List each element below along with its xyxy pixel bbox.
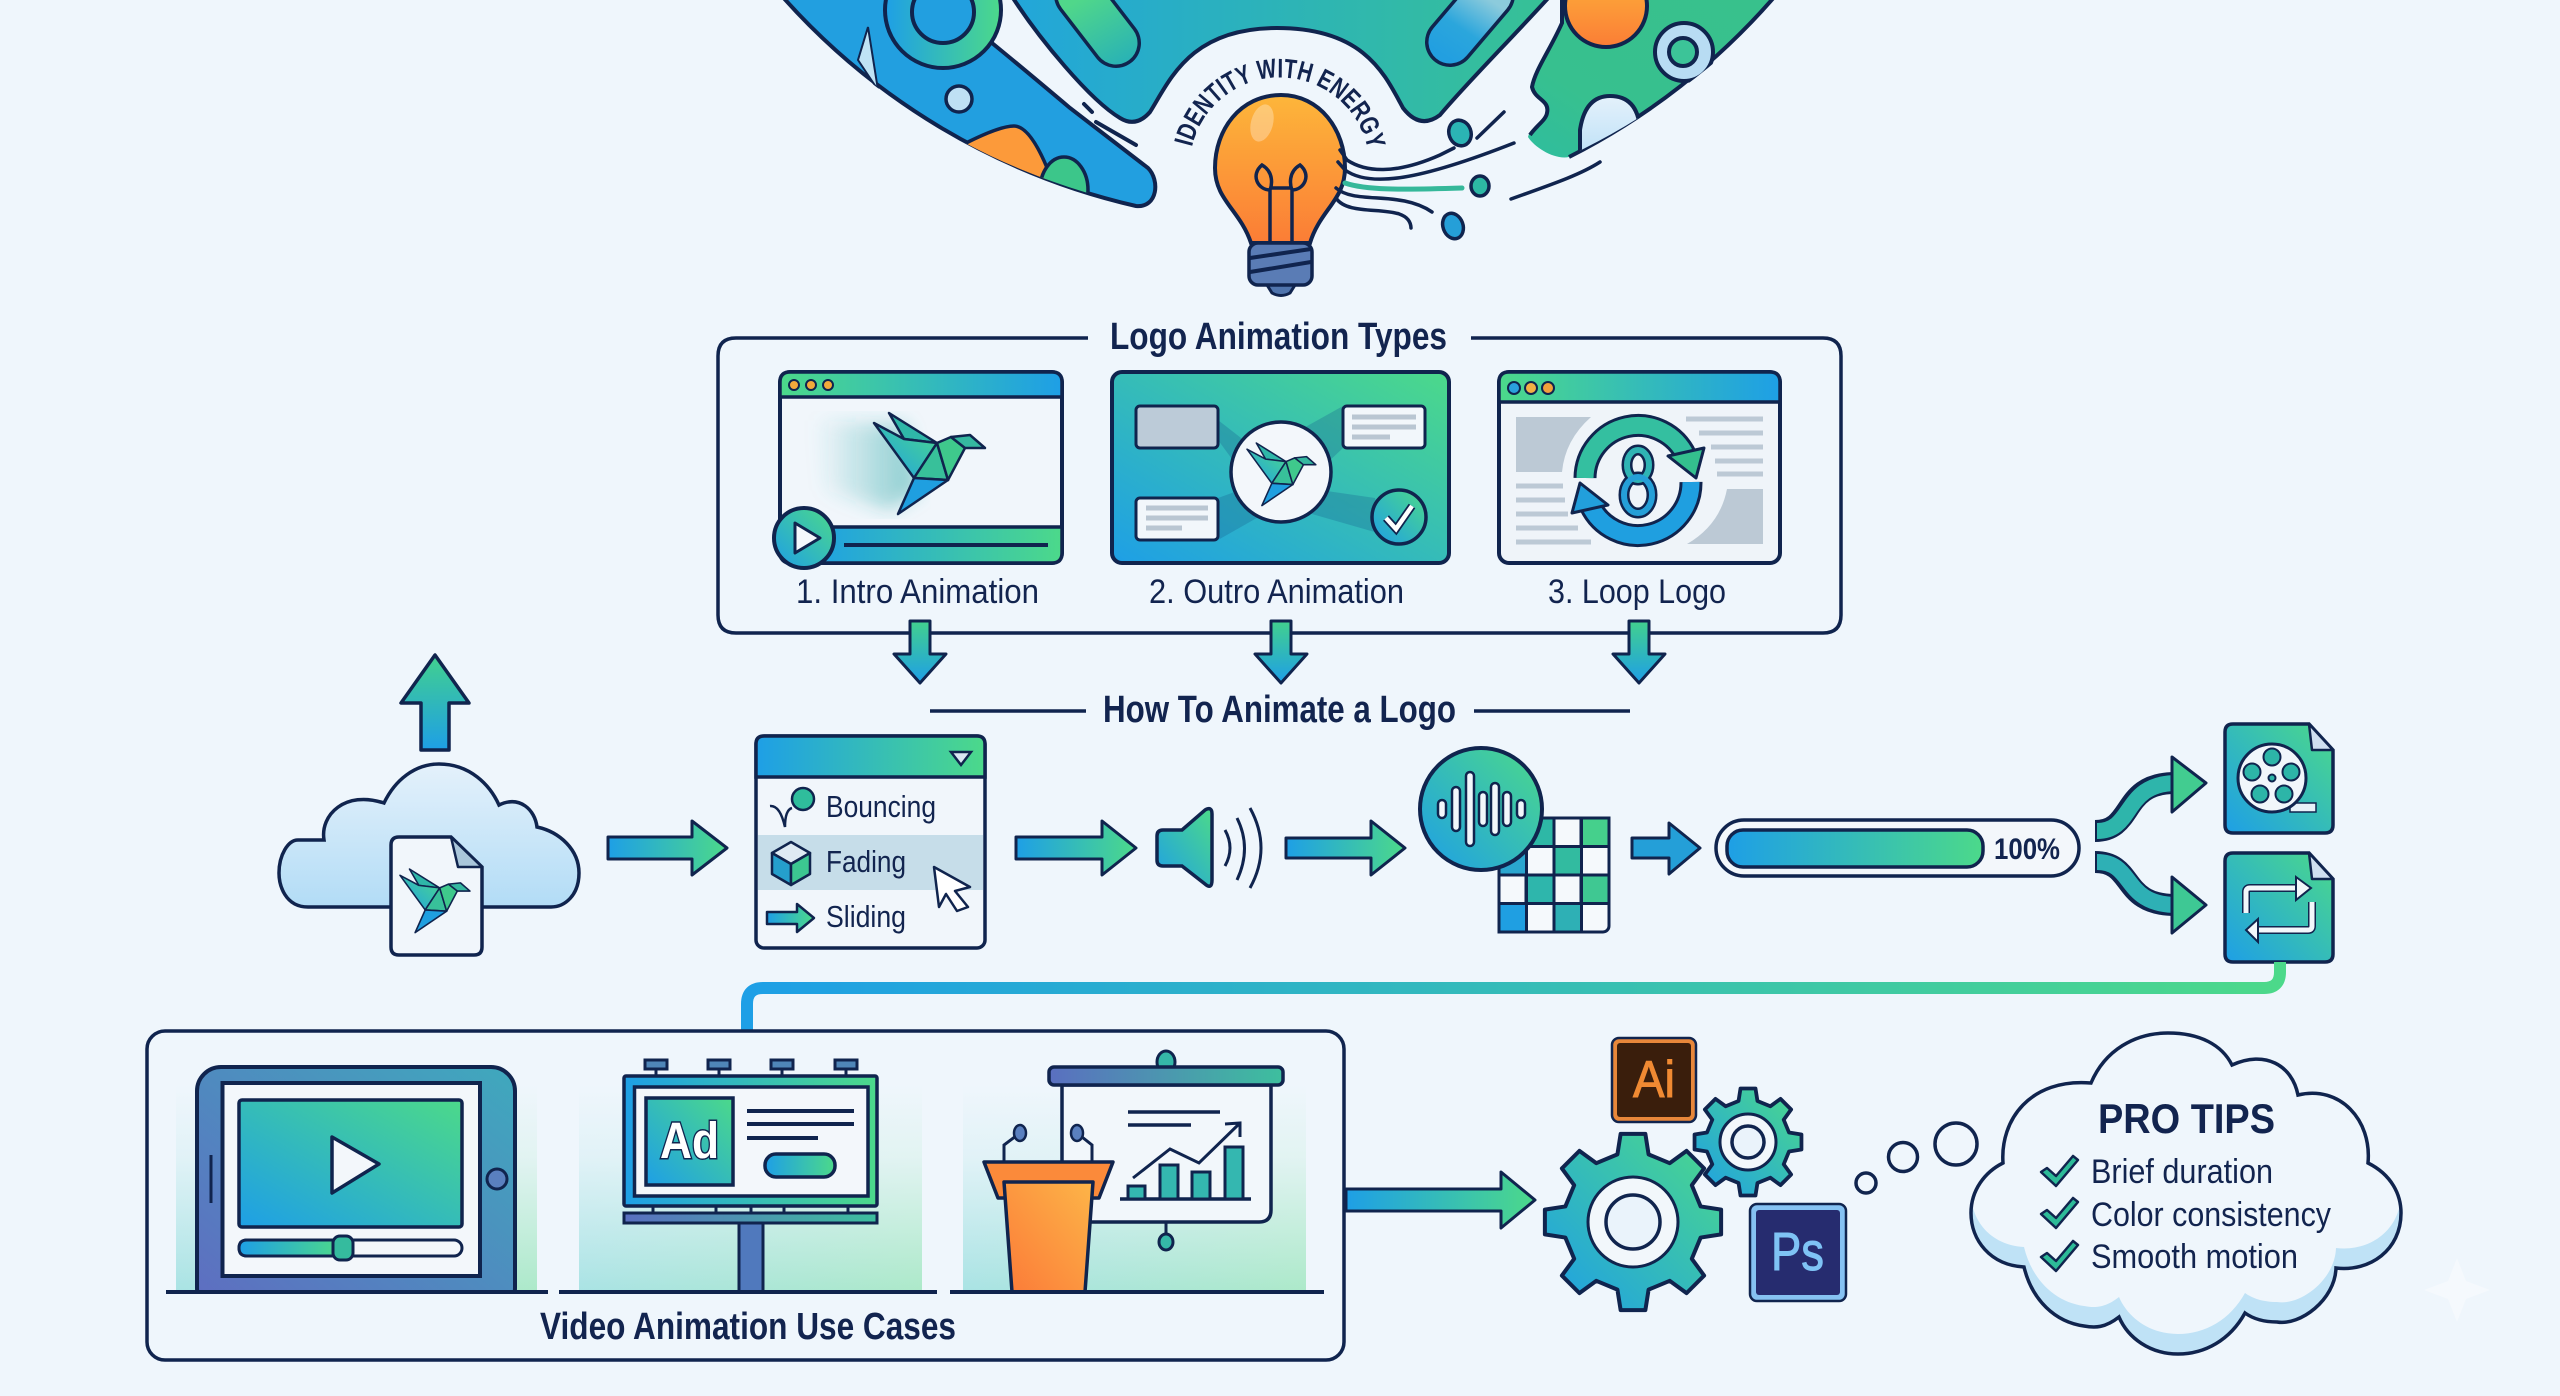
- tip: color consistency: Color consistency: [2091, 1196, 2331, 1234]
- arrow: timeline to render: [1632, 823, 1700, 874]
- use case: presentation: [963, 1051, 1306, 1292]
- tip: smooth motion: Smooth motion: [2091, 1238, 2298, 1276]
- arrow: curved to loop file: [2095, 862, 2206, 933]
- small light dot: [946, 86, 972, 112]
- card: loop logo: [1499, 372, 1780, 563]
- light ring: [1655, 23, 1713, 81]
- label: loop logo: 3. Loop Logo: [1548, 573, 1726, 611]
- card: intro animation: [774, 372, 1062, 568]
- icon: cursor: [934, 867, 970, 911]
- icon: loop file: [2225, 853, 2333, 962]
- top identity disc: [781, 0, 1776, 223]
- light hill: [1578, 94, 1639, 150]
- panel: animation menu: [756, 736, 985, 948]
- sparkle watermark: [2424, 1258, 2490, 1322]
- icon: speaker: [1157, 808, 1261, 888]
- arc text: identity with energy: [1192, 77, 1370, 221]
- arrow: upload up: [401, 655, 469, 750]
- dashes: [1084, 104, 1136, 145]
- icon: origami bird small: [1247, 443, 1316, 506]
- panel: logo animation types: [718, 316, 1841, 633]
- callout: pro tips cloud: [1971, 1013, 2401, 1354]
- arrow: use cases to tools: [1346, 1172, 1535, 1228]
- heading: logo animation types: Logo Animation Types: [1110, 316, 1447, 358]
- label: sliding: Sliding: [826, 899, 906, 934]
- energy dot blue: [1439, 210, 1467, 242]
- icon: cube: [772, 842, 810, 885]
- icon: podium: [984, 1125, 1113, 1292]
- progress bar: [1716, 820, 2079, 876]
- icon: illustrator badge: [1612, 1038, 1696, 1122]
- arrow: audio to timeline: [1286, 821, 1405, 875]
- heading: video animation use cases: Video Animation Use Cases: [540, 1306, 956, 1348]
- orange hill: [966, 126, 1048, 185]
- icon: timeline grid: [1499, 818, 1609, 932]
- arrow: menu to audio: [1016, 821, 1136, 875]
- icon: slide arrow: [767, 904, 814, 932]
- chart: growth bars: [1120, 1112, 1251, 1199]
- arrow: down from loop: [1613, 621, 1665, 683]
- icon: play button: [774, 508, 834, 568]
- label: outro animation: 2. Outro Animation: [1149, 573, 1404, 611]
- icon: loop arrows: [1572, 425, 1704, 536]
- label: 100%: 100%: [1994, 833, 2060, 866]
- connector line: [747, 962, 2280, 1032]
- label: intro animation: 1. Intro Animation: [796, 573, 1039, 611]
- green ring: [885, 0, 1001, 68]
- green disc segment: [1528, 0, 1776, 157]
- thought bubbles: [1856, 1123, 1977, 1193]
- energy dot teal: [1445, 117, 1475, 149]
- label: ai: Ai: [1633, 1051, 1675, 1109]
- icon: check badge: [1372, 490, 1426, 544]
- blue disc segment: [781, 0, 1155, 206]
- panel: video animation use cases: [147, 1031, 1344, 1360]
- arrow: curved to video file: [2095, 757, 2206, 831]
- card: outro animation: [1112, 372, 1449, 563]
- icon: video file: [2225, 724, 2333, 833]
- pen sliver: [858, 27, 878, 90]
- label: ad: Ad: [660, 1112, 719, 1169]
- icon: small gear: [1695, 1089, 1801, 1195]
- label: fading: Fading: [826, 844, 906, 879]
- orange circle: [1565, 0, 1647, 47]
- green segment outline: [1530, 0, 1776, 157]
- label: bouncing: Bouncing: [826, 789, 936, 824]
- arrow: down from intro: [894, 621, 946, 683]
- infographic canvas: IDENTITY WITH ENERGY: [1174, 58, 1386, 146]
- arrow: cloud to menu: [608, 821, 727, 875]
- icon: bouncing ball: [770, 788, 814, 827]
- icon: large gear: [1545, 1134, 1721, 1310]
- icon: audio waveform circle: [1420, 748, 1542, 870]
- icon: light bulb: [1215, 95, 1345, 296]
- blue finger: [1450, 0, 1490, 42]
- icon: cloud with logo file: [279, 764, 579, 955]
- energy dot green: [1471, 176, 1489, 196]
- disc ornaments: [856, 0, 1715, 193]
- green hill: [1040, 155, 1090, 193]
- icon: photoshop badge: [1750, 1204, 1846, 1301]
- tip: brief duration: Brief duration: [2091, 1153, 2273, 1191]
- green finger: [1079, 0, 1116, 43]
- label: ps: Ps: [1771, 1222, 1824, 1282]
- energy wisps: [1336, 112, 1600, 242]
- arrow: down from outro: [1255, 621, 1307, 683]
- heading: pro tips: PRO TIPS: [2098, 1095, 2275, 1142]
- teal disc segment: [1011, 0, 1551, 122]
- use case: billboard: [579, 1060, 922, 1292]
- heading: how to animate a logo: How To Animate a Logo: [1103, 689, 1456, 731]
- icon: origami bird: [874, 413, 985, 514]
- use case: tablet: [176, 1067, 537, 1312]
